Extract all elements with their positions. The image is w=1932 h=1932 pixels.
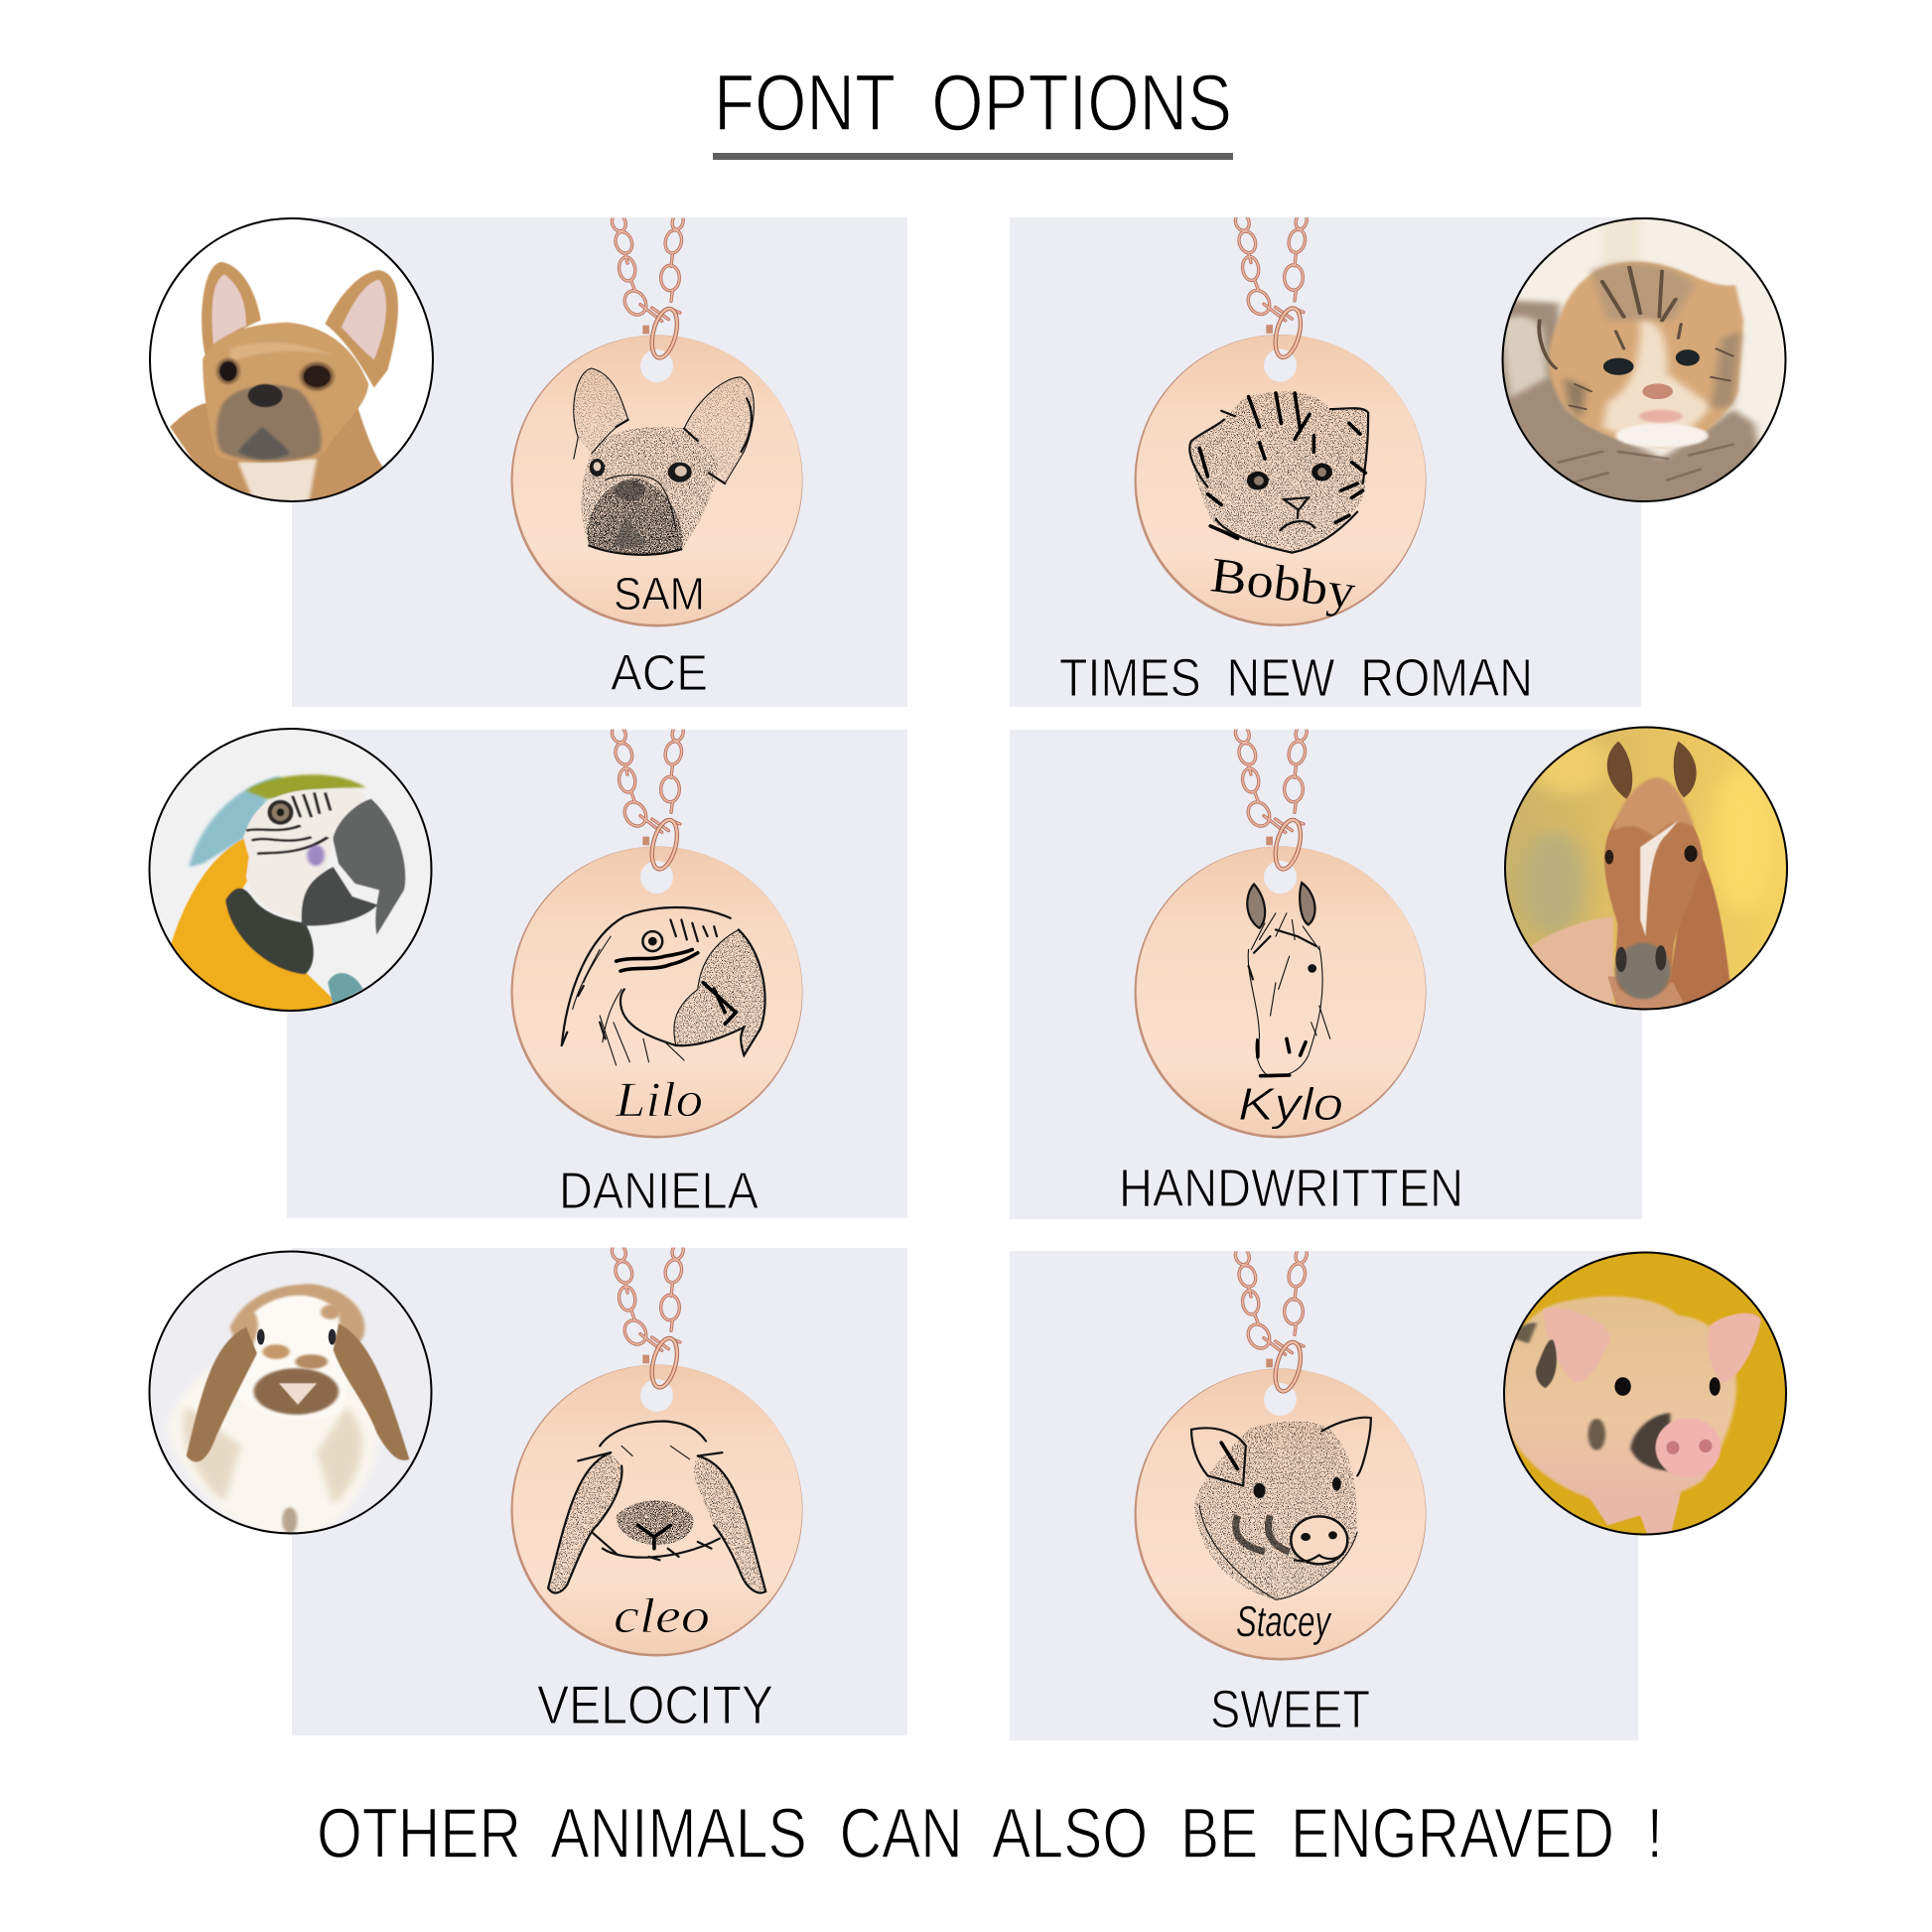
photo circle: dog <box>150 218 433 508</box>
engraving: macaw <box>562 907 765 1065</box>
panel: Daniela font with parrot <box>287 724 907 1220</box>
photo circle: piglet <box>1498 1253 1786 1537</box>
engraving: french bulldog <box>574 368 754 555</box>
photo circle: horse <box>1499 725 1793 1013</box>
font label: ACE: ACE <box>611 644 708 701</box>
engraved name: Lilo: Lilo <box>615 1071 703 1127</box>
engraving: lop rabbit <box>548 1421 765 1592</box>
font label: DANIELA: DANIELA <box>559 1163 759 1220</box>
font label: HANDWRITTEN: HANDWRITTEN <box>1119 1159 1463 1218</box>
panel: Times New Roman font with cat <box>1010 211 1641 708</box>
font label: VELOCITY: VELOCITY <box>537 1674 773 1735</box>
necklace: pig pendant <box>1134 1246 1426 1660</box>
engraved name: Kylo: Kylo <box>1238 1078 1343 1130</box>
panel: Velocity font with rabbit <box>292 1242 907 1735</box>
photo circle: rabbit <box>149 1251 431 1539</box>
engraving: piglet <box>1191 1418 1371 1599</box>
panel: ACE font with dog <box>292 212 907 707</box>
engraving: horse <box>1247 883 1330 1077</box>
engraved name: Stacey: Stacey <box>1236 1597 1332 1646</box>
engraved name: cleo: cleo <box>614 1587 710 1643</box>
font label: SWEET: SWEET <box>1210 1680 1370 1739</box>
engraved name: SAM: SAM <box>614 568 705 620</box>
necklace: parrot pendant <box>510 724 802 1138</box>
font label: TIMES NEW ROMAN: TIMES NEW ROMAN <box>1059 648 1533 708</box>
photo circle: kitten <box>1482 214 1785 508</box>
necklace: cat pendant <box>1134 211 1426 626</box>
photo circle: macaw <box>149 729 431 1019</box>
panel: Sweet font with pig <box>1010 1246 1638 1740</box>
engraved name: Bobby: Bobby <box>1207 546 1358 620</box>
necklace: dog pendant <box>510 212 802 627</box>
engraving: kitten <box>1189 391 1368 553</box>
panel: Handwritten font with horse <box>1010 724 1642 1219</box>
necklace: horse pendant <box>1134 724 1426 1138</box>
title: FONT OPTIONS <box>714 59 1232 148</box>
necklace: rabbit pendant <box>510 1242 802 1656</box>
title underline <box>713 153 1233 160</box>
footer text: OTHER ANIMALS CAN ALSO BE ENGRAVED ! <box>317 1795 1663 1873</box>
